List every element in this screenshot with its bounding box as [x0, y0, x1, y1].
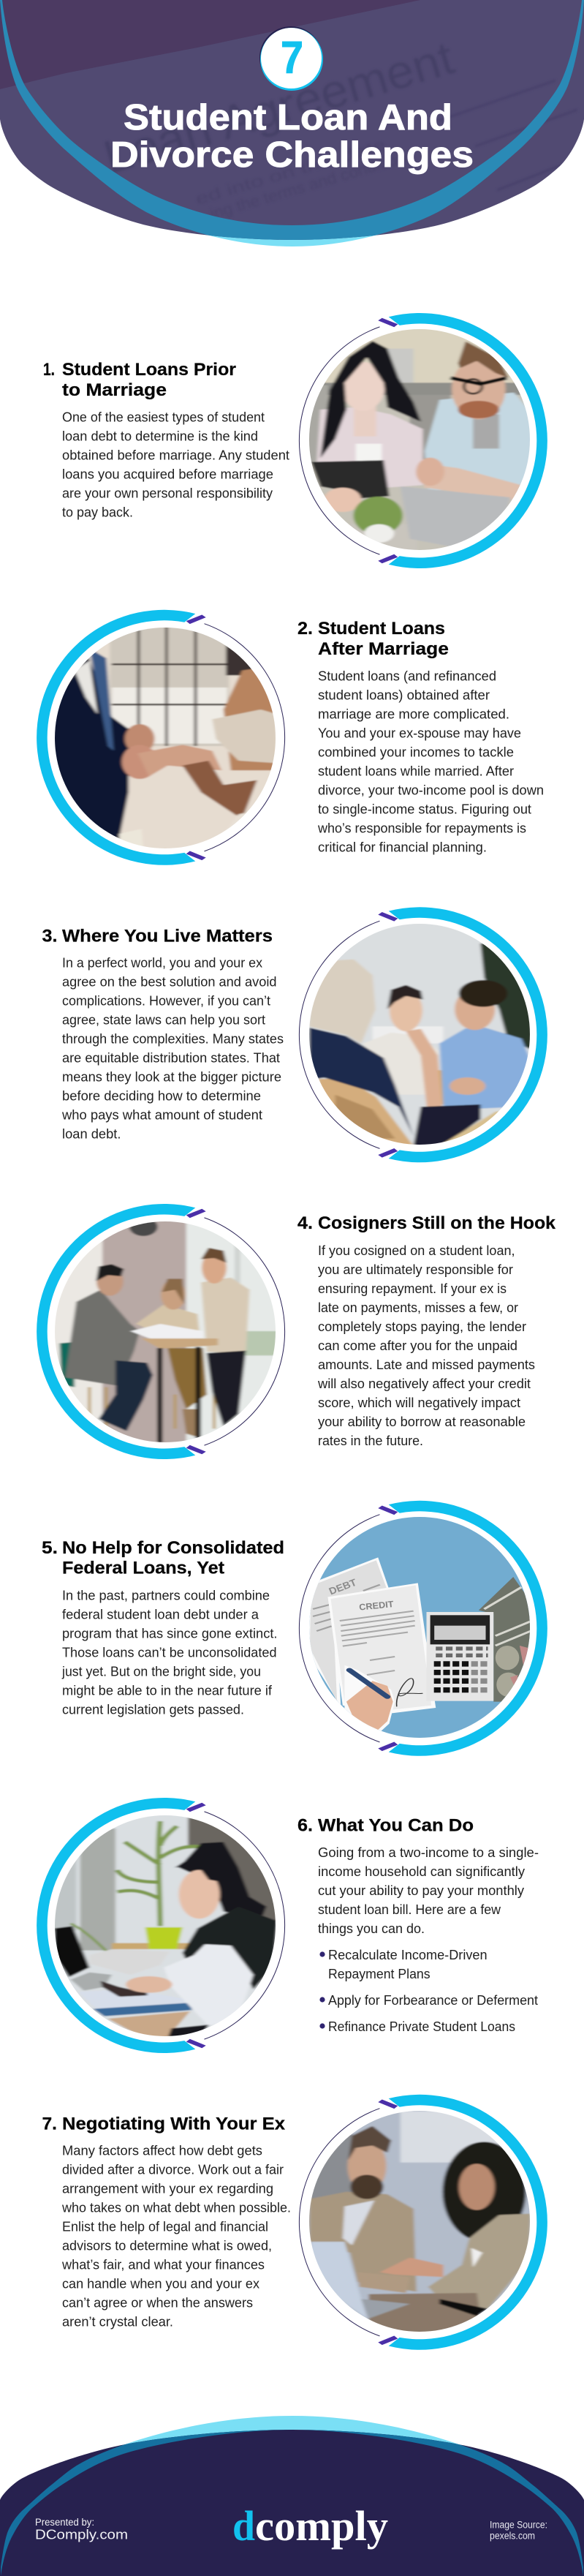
- image source: Image Source:: [490, 2520, 547, 2531]
- body 2: You and your ex-spouse may have: [318, 726, 521, 741]
- banner background photo: ing the terms and conditions: [208, 146, 417, 223]
- body 7: Many factors affect how debt gets: [62, 2144, 262, 2158]
- body 6: cut your ability to pay your monthly: [318, 1883, 524, 1898]
- body 7: aren’t crystal clear.: [62, 2315, 173, 2330]
- heading 1: Student Loans Prior: [62, 360, 236, 380]
- ring 2: [37, 610, 285, 865]
- footer background: [0, 2430, 584, 2576]
- photo: couple talking at a table: [306, 2109, 536, 2335]
- swoosh: light band below banner: [0, 0, 584, 246]
- body 4: [317, 1243, 535, 1448]
- body 1: to pay back.: [62, 505, 133, 520]
- photo: couple reviewing paperwork: [306, 327, 536, 554]
- header banner: [0, 0, 584, 249]
- body 5: just yet. But on the bright side, you: [61, 1665, 261, 1679]
- body 5: current legislation gets passed.: [62, 1703, 244, 1717]
- body 6: student loan bill. Here are a few: [318, 1902, 501, 1917]
- body 3: who pays what amount of student: [61, 1108, 262, 1123]
- heading 4: 4.: [297, 1213, 313, 1233]
- section 5 text: [42, 1538, 284, 1717]
- body 3: [61, 956, 284, 1142]
- illustration: debt and credit documents with calculator: [306, 1515, 536, 1742]
- heading 5: [42, 1538, 284, 1578]
- body 4: amounts. Late and missed payments: [318, 1357, 535, 1372]
- heading 1: 1.: [43, 360, 55, 380]
- photo: mediation meeting: [306, 922, 536, 1148]
- body 2: [317, 669, 544, 855]
- body 2: combined your incomes to tackle: [318, 745, 514, 760]
- body 4: your ability to borrow at reasonable: [318, 1415, 526, 1429]
- body 6: income household can significantly: [318, 1864, 525, 1879]
- body 7: can handle when you and your ex: [62, 2277, 259, 2291]
- body 4: you are ultimately responsible for: [318, 1262, 513, 1277]
- section 6 text: [297, 1815, 539, 2034]
- section 2 text: [297, 619, 544, 855]
- body 6: things you can do.: [318, 1921, 425, 1936]
- body 7: who takes on what debt when possible.: [61, 2201, 291, 2215]
- footer banner: [0, 2416, 584, 2576]
- body 4: ensuring repayment. If your ex is: [318, 1281, 507, 1296]
- heading 3: Where You Live Matters: [62, 926, 273, 946]
- body 5: federal student loan debt under a: [62, 1608, 259, 1622]
- section 3 photo ring: [299, 907, 547, 1162]
- heading 6: 6.: [297, 1815, 313, 1835]
- ring 6: [37, 1798, 285, 2053]
- body 2: critical for financial planning.: [318, 840, 487, 855]
- body 3: agree, state laws can help you sort: [62, 1013, 265, 1028]
- presented by: [35, 2517, 128, 2542]
- logo: dcomply: comply: [255, 2502, 388, 2550]
- body 5: [61, 1589, 278, 1717]
- body 5: program that has since gone extinct.: [62, 1627, 278, 1641]
- section 1 text: [43, 360, 289, 520]
- body 7: divided after a divorce. Work out a fair: [62, 2163, 284, 2177]
- section 1 photo ring: [299, 313, 547, 568]
- body 1: loan debt to determine is the kind: [62, 429, 258, 444]
- body 3: In a perfect world, you and your ex: [62, 956, 262, 971]
- number badge: 7: [281, 33, 303, 83]
- heading 2: [297, 619, 449, 659]
- document: debt: [307, 1557, 390, 1706]
- document: credit: [327, 1583, 436, 1715]
- presented by: DComply.com: [35, 2528, 128, 2542]
- section 2 photo ring: [37, 610, 285, 865]
- heading 4: Cosigners Still on the Hook: [318, 1213, 555, 1233]
- body 1: loans you acquired before marriage: [62, 467, 273, 482]
- document: credit: CREDIT: [359, 1599, 395, 1613]
- bullet list: Refinance Private Student Loans: [328, 2019, 515, 2034]
- heading 1: to Marriage: [62, 380, 167, 400]
- calculator: [426, 1612, 493, 1701]
- body 7: arrangement with your ex regarding: [62, 2182, 273, 2196]
- banner background photo: [0, 0, 584, 249]
- body 2: to single-income status. Figuring out: [318, 802, 531, 817]
- body 2: marriage are more complicated.: [318, 707, 509, 722]
- bullet list: [319, 1948, 538, 2034]
- body 4: rates in the future.: [318, 1434, 423, 1448]
- heading 1: [43, 360, 236, 400]
- title: Student Loan And: [124, 98, 452, 138]
- body 3: agree on the best solution and avoid: [62, 975, 276, 990]
- section 6 photo ring: [37, 1798, 285, 2053]
- body 4: can come after you for the unpaid: [318, 1338, 517, 1353]
- body 4: If you cosigned on a student loan,: [318, 1243, 515, 1258]
- body 7: [61, 2144, 291, 2330]
- body 2: who’s responsible for repayments is: [317, 821, 526, 836]
- body 1: obtained before marriage. Any student: [62, 448, 289, 463]
- section 4 photo ring: [37, 1204, 285, 1459]
- bullet list: Repayment Plans: [328, 1967, 431, 1981]
- body 1: are your own personal responsibility: [62, 486, 273, 501]
- body 3: before deciding how to determine: [62, 1089, 261, 1104]
- document: debt: DEBT: [327, 1576, 359, 1597]
- body 6: [318, 1845, 539, 1936]
- heading 7: 7.: [42, 2114, 57, 2134]
- ring 5: [299, 1501, 547, 1756]
- body 2: student loans) obtained after: [318, 688, 490, 703]
- heading 2: Student Loans: [318, 619, 445, 639]
- body 5: might be able to in the near future if: [62, 1684, 273, 1698]
- banner background photo: ed into on this date: [193, 135, 387, 208]
- body 3: means they look at the bigger picture: [62, 1070, 281, 1085]
- photo: exchanging rings: [52, 624, 279, 851]
- section 3 text: [42, 926, 284, 1142]
- body 3: loan debt.: [62, 1127, 121, 1142]
- body 4: will also negatively affect your credit: [317, 1376, 531, 1391]
- body 3: through the complexities. Many states: [62, 1032, 284, 1047]
- hand with pen: [344, 1665, 395, 1732]
- body 7: advisors to determine what is owed,: [62, 2239, 272, 2253]
- title: [110, 98, 474, 175]
- body 2: divorce, your two-income pool is down: [318, 783, 544, 798]
- banner background photo: Loan Agreement: [98, 31, 460, 184]
- body 7: can’t agree or when the answers: [62, 2296, 253, 2311]
- section 7 text: [42, 2114, 291, 2330]
- heading 2: After Marriage: [318, 639, 449, 659]
- heading 2: 2.: [297, 619, 313, 639]
- footer swoosh dark part: [1, 2416, 583, 2576]
- title: Divorce Challenges: [110, 135, 474, 175]
- number badge: [259, 26, 323, 91]
- body 2: student loans while married. After: [318, 764, 514, 779]
- ring 1: [299, 313, 547, 568]
- image source: pexels.com: [490, 2531, 535, 2542]
- body 4: completely stops paying, the lender: [318, 1319, 526, 1334]
- bullet list: Recalculate Income-Driven: [328, 1948, 488, 1962]
- body 5: In the past, partners could combine: [62, 1589, 270, 1603]
- body 7: what’s fair, and what your finances: [61, 2258, 265, 2272]
- photo: woman working with calculator: [52, 1812, 279, 2039]
- presented by: Presented by:: [35, 2517, 94, 2528]
- body 3: complications. However, if you can’t: [62, 994, 270, 1009]
- ring 7: [299, 2095, 547, 2350]
- body 4: score, which will negatively impact: [318, 1396, 520, 1410]
- body 7: Enlist the help of legal and financial: [62, 2220, 268, 2234]
- heading 5: 5.: [42, 1538, 58, 1558]
- body 5: Those loans can’t be unconsolidated: [62, 1646, 276, 1660]
- body 4: late on payments, misses a few, or: [318, 1300, 518, 1315]
- heading 7: Negotiating With Your Ex: [62, 2114, 285, 2134]
- heading 5: No Help for Consolidated: [62, 1538, 284, 1558]
- photo: three people signing papers: [52, 1218, 279, 1446]
- section 7 photo ring: [299, 2095, 547, 2350]
- heading 5: Federal Loans, Yet: [62, 1559, 224, 1578]
- logo: dcomply: d: [232, 2502, 255, 2550]
- image source: [490, 2520, 547, 2542]
- body 3: are equitable distribution states. That: [62, 1051, 280, 1066]
- ring 3: [299, 907, 547, 1162]
- footer swoosh light part: [1, 2416, 583, 2576]
- body 1: [62, 410, 289, 520]
- heading 3: 3.: [42, 926, 57, 946]
- body 6: Going from a two-income to a single-: [318, 1845, 539, 1860]
- ring 4: [37, 1204, 285, 1459]
- body 2: Student loans (and refinanced: [318, 669, 496, 684]
- money: [479, 1577, 531, 1702]
- body 1: One of the easiest types of student: [62, 410, 265, 425]
- bullet list: Apply for Forbearance or Deferment: [328, 1993, 538, 2008]
- section 5 photo ring: [299, 1501, 547, 1756]
- heading 6: What You Can Do: [318, 1815, 474, 1835]
- section 4 text: [297, 1213, 555, 1448]
